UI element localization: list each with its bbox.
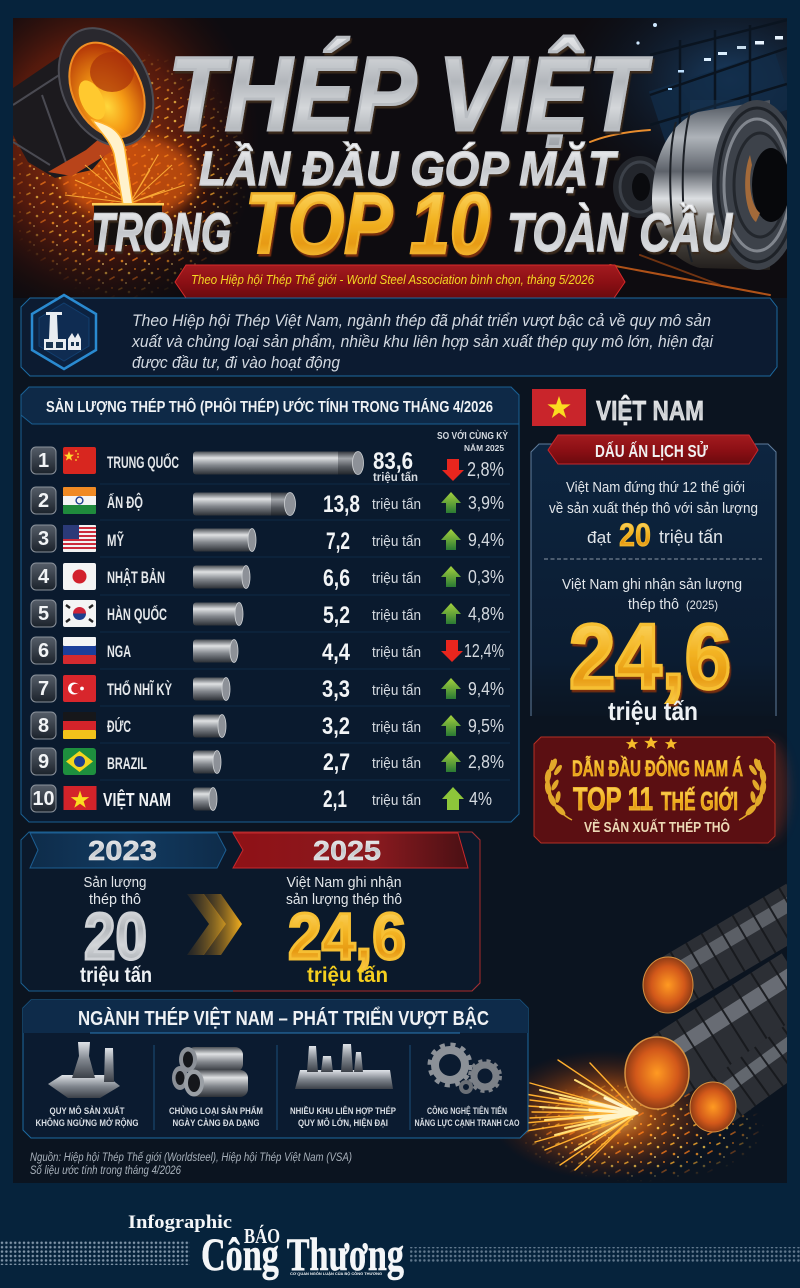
ribbon: source [175, 265, 625, 298]
row 9: Brazil [31, 748, 504, 776]
source note: Nguồn: Hiệp hội Thép Thế giới (Worldsteel), Hiệp hội Thép Việt Nam (VSA) [30, 1152, 352, 1164]
panel: crude steel output chart [21, 387, 519, 822]
item: product range [169, 1047, 263, 1129]
ribbon: source: Theo Hiệp hội Thép Thế giới - World Steel Association bình chọn, tháng 5/2026 [191, 273, 594, 287]
row 1: Trung Quốc: 83,6 [373, 448, 413, 475]
factory windows [636, 22, 787, 142]
arrow: up [441, 751, 461, 772]
row 2: Ấn Độ: ẤN ĐỘ [107, 493, 143, 512]
molten stream [92, 120, 133, 205]
glow: pour [62, 136, 198, 220]
flag: Brazil [63, 748, 96, 775]
row 10: Việt Nam: 2,1 [323, 786, 347, 813]
bar: 4,4 [193, 640, 238, 662]
2025 figures: triệu tấn [307, 964, 388, 987]
row 8: Đức: ĐỨC [107, 717, 131, 736]
arrow: up [441, 529, 461, 550]
2023 figures: triệu tấn [80, 964, 152, 987]
row 2: Ấn Độ: 3,9% [468, 493, 504, 513]
row 10: Việt Nam: 4% [469, 789, 492, 809]
item: integrated complexes: QUY MÔ LỚN, HIỆN ĐẠI [298, 1117, 388, 1129]
title: THÉP VIỆT: THÉP VIỆT [168, 34, 652, 153]
flag: Japan [63, 563, 96, 590]
icon: flag [532, 389, 586, 426]
row 6: Nga: 12,4% [464, 641, 504, 661]
laurel: right [739, 757, 767, 820]
panel: growth of the Vietnamese steel industry [23, 1000, 528, 1138]
row 4: Nhật Bản [31, 563, 504, 592]
rank 9: 9 [38, 751, 49, 773]
rank 4 [31, 563, 56, 590]
footer dots: right [410, 1247, 800, 1262]
row 6: Nga: NGA [107, 643, 131, 661]
rank 7 [31, 675, 56, 702]
intro text: được đầu tư, đi vào hoạt động [132, 354, 341, 372]
row 9: Brazil: 2,7 [323, 749, 350, 776]
title: TRONG: TRONG [91, 201, 231, 263]
ladle body [13, 27, 154, 178]
bar: 3,3 [193, 678, 230, 700]
rank 5: 5 [38, 603, 49, 625]
row 7: Thổ Nhĩ Kỳ: 9,4% [468, 679, 504, 699]
row 8: Đức: triệu tấn [372, 720, 421, 736]
outer margin cover [787, 890, 800, 1190]
row 3: Mỹ: triệu tấn [372, 534, 421, 550]
rank 2: 2 [38, 490, 49, 512]
bar: 6,6 [193, 566, 250, 588]
sparks: scattered [524, 1081, 759, 1181]
text: ranking: Việt Nam đứng thứ 12 thế giới [566, 480, 745, 496]
row 8: Đức: 9,5% [468, 716, 504, 736]
row 3: Mỹ [31, 525, 504, 555]
chart header: SẢN LƯỢNG THÉP THÔ (PHÔI THÉP) ƯỚC TÍNH TRONG THÁNG 4/2026 [46, 397, 493, 416]
publisher logo: Công Thương [201, 1229, 404, 1281]
row 10: Việt Nam [31, 785, 492, 813]
rank 6: 6 [38, 640, 49, 662]
chart header [21, 387, 519, 424]
publisher logo [128, 1212, 404, 1281]
header ribbon: DẤU ẤN LỊCH SỬ [595, 440, 708, 461]
row 6: Nga [31, 637, 504, 666]
row dividers [100, 484, 510, 780]
header artwork [13, 18, 787, 298]
row 3: Mỹ: 9,4% [468, 530, 504, 550]
2025 figures: Việt Nam ghi nhận [286, 875, 402, 891]
title: LẦN ĐẦU GÓP MẶT: LẦN ĐẦU GÓP MẶT [199, 142, 618, 196]
row 1: Trung Quốc: 2,8% [467, 459, 504, 481]
rank 7: 7 [38, 678, 49, 700]
footer dots: left [0, 1241, 190, 1265]
text: ranking: 20 [619, 517, 651, 553]
bar: 5,2 [193, 602, 243, 626]
title: TOP 10: TOP 10 [245, 176, 490, 272]
header ribbon [548, 435, 758, 464]
publisher logo: CƠ QUAN NGÔN LUẬN CỦA BỘ CÔNG THƯƠNG [290, 1271, 382, 1276]
bar: 83,6 [193, 452, 364, 474]
row 1: Trung Quốc [31, 447, 504, 484]
icon: gears [430, 1045, 500, 1092]
2025 figures: 24,6 [288, 899, 406, 973]
row 10: Việt Nam: triệu tấn [372, 793, 421, 809]
arrow: up [441, 678, 461, 699]
row 10: Việt Nam: VIỆT NAM [103, 789, 171, 810]
arrow: up [441, 715, 461, 736]
flag: Russia [63, 637, 96, 664]
rank 8 [31, 712, 56, 739]
row 3: Mỹ: MỸ [107, 530, 124, 550]
rank 3: 3 [38, 528, 49, 550]
rebar 2 [625, 973, 800, 1109]
2023 figures [80, 875, 152, 987]
intro text: xuất và chủng loại sản phẩm, nhiều khu liên hợp sản xuất thép quy mô lớn, hiện đại [131, 333, 714, 351]
item: production scale [36, 1042, 138, 1129]
intro text [131, 312, 714, 372]
row 5: Hàn Quốc: 4,8% [468, 604, 504, 624]
2025 figures [286, 875, 406, 987]
rank 10: 10 [32, 788, 54, 810]
row 2: Ấn Độ: 13,8 [323, 491, 360, 518]
badge: leading Southeast Asia: TOP 11 [573, 781, 653, 817]
2025 figures: sản lượng thép thô [286, 892, 402, 908]
flag: South Korea [63, 600, 96, 627]
sparks: furnace [13, 55, 245, 298]
row 2: Ấn Độ: triệu tấn [372, 497, 421, 513]
big number: 24,6 [569, 606, 731, 708]
text: 2025 output [562, 577, 742, 613]
row 7: Thổ Nhĩ Kỳ [31, 675, 504, 703]
row 1: Trung Quốc: triệu tấn [373, 470, 418, 484]
row 2: Ấn Độ [31, 487, 504, 518]
item: integrated complexes [290, 1044, 397, 1129]
intro text: Theo Hiệp hội Thép Việt Nam, ngành thép đã phát triển vượt bậc cả về quy mô sản [132, 312, 711, 330]
bar: 2,7 [193, 750, 221, 774]
row 1: Trung Quốc: TRUNG QUỐC [107, 452, 179, 472]
arrow: chevrons [187, 894, 242, 955]
comparison column header: NĂM 2025 [464, 443, 504, 453]
flag: Vietnam [64, 786, 96, 810]
item: product range: NGÀY CÀNG ĐA DẠNG [172, 1118, 260, 1129]
item: technology: CÔNG NGHỆ TIÊN TIẾN [427, 1105, 507, 1117]
spark rays [520, 1060, 637, 1170]
title: TOÀN CẦU: TOÀN CẦU [507, 201, 733, 263]
comparison column header [437, 429, 508, 453]
illustration: rebar and sparks [490, 900, 800, 1183]
row 8: Đức: 3,2 [322, 713, 350, 740]
text: 2025 output: thép thô [628, 597, 679, 613]
row 5: Hàn Quốc: 5,2 [323, 602, 350, 629]
rank 1 [31, 447, 56, 474]
arrow: up [442, 787, 464, 810]
icon: factory [32, 295, 96, 369]
flag: USA [63, 525, 96, 552]
heading: Việt Nam flag [532, 389, 704, 426]
text: 2025 output: (2025) [686, 598, 718, 612]
rebar 3 [690, 1037, 800, 1132]
item: technology [414, 1045, 520, 1129]
badge: leading Southeast Asia: THẾ GIỚI [661, 786, 738, 816]
row 5: Hàn Quốc: triệu tấn [372, 608, 421, 624]
row 4: Nhật Bản: 6,6 [323, 565, 350, 592]
2023 figures: Sản lượng [84, 875, 146, 891]
rank 8: 8 [38, 715, 49, 737]
item: integrated complexes: NHIỀU KHU LIÊN HỢP THÉP [290, 1105, 397, 1117]
bar: 3,2 [193, 714, 226, 738]
row 7: Thổ Nhĩ Kỳ: triệu tấn [372, 683, 421, 699]
arrow: up [441, 603, 461, 624]
flag: Germany [63, 712, 96, 739]
2023 figures: thép thô [89, 892, 141, 908]
arrow: down [442, 459, 464, 481]
publisher logo: Infographic [128, 1212, 232, 1233]
flag: Turkey [63, 675, 96, 702]
icon: industrial complex [295, 1044, 393, 1089]
row 4: Nhật Bản: NHẬT BẢN [107, 568, 165, 587]
row 9: Brazil: BRAZIL [107, 755, 147, 773]
panel: historic mark [531, 435, 776, 726]
bar: 2,1 [193, 788, 217, 810]
icon: steel pipes [172, 1047, 248, 1097]
heading: NGÀNH THÉP VIỆT NAM – PHÁT TRIỂN VƯỢT BẬC [78, 1006, 489, 1030]
heading: Việt Nam flag: VIỆT NAM [596, 395, 704, 426]
panel: historic mark: triệu tấn [608, 696, 698, 726]
row 9: Brazil: triệu tấn [372, 756, 421, 772]
large steel coil [652, 100, 800, 270]
band: 2023 [30, 833, 226, 868]
row 4: Nhật Bản: 0,3% [468, 567, 504, 587]
comparison column header: SO VỚI CÙNG KỲ [437, 429, 508, 442]
publisher logo: BÁO [244, 1224, 280, 1248]
row 4: Nhật Bản: triệu tấn [372, 571, 421, 587]
text: ranking [549, 480, 758, 553]
row 6: Nga: 4,4 [322, 639, 351, 666]
item: production scale: QUY MÔ SẢN XUẤT [50, 1105, 125, 1117]
text: 2025 output: Việt Nam ghi nhận sản lượng [562, 577, 742, 593]
pool block [92, 203, 164, 245]
source note [30, 1152, 352, 1177]
band: 2025: 2025 [313, 835, 381, 866]
stars [626, 736, 677, 749]
row 5: Hàn Quốc [31, 600, 504, 629]
flag: China [63, 447, 96, 474]
item: technology: NĂNG LỰC CẠNH TRANH CAO [414, 1118, 520, 1129]
text: ranking: đạt [587, 528, 611, 547]
rank 5 [31, 600, 56, 627]
badge: leading Southeast Asia: VỀ SẢN XUẤT THÉP THÔ [584, 818, 730, 836]
text: ranking: về sản xuất thép thô với sản lượng [549, 501, 758, 517]
glow: factory [596, 18, 787, 158]
rebar 1 [643, 900, 800, 1013]
2023 figures: 20 [84, 899, 147, 973]
source note: Số liệu ước tính trong tháng 4/2026 [30, 1165, 181, 1177]
bar: 7,2 [193, 528, 256, 552]
text: ranking: triệu tấn [659, 527, 723, 547]
arrow: down [441, 640, 463, 662]
band: 2025 [233, 833, 468, 868]
arrow: up [441, 566, 461, 587]
rank 9 [31, 748, 56, 775]
row 9: Brazil: 2,8% [468, 752, 504, 772]
rank 2 [31, 487, 56, 514]
floor reflections [590, 130, 770, 295]
rank 1: 1 [38, 450, 49, 472]
band: 2023: 2023 [88, 835, 157, 866]
laurel: left [544, 757, 572, 820]
row 3: Mỹ: 7,2 [326, 528, 350, 555]
panel: 2023 to 2025 comparison [21, 832, 480, 991]
row 8: Đức [31, 712, 504, 740]
rank 3 [31, 525, 56, 552]
arrow: up [441, 492, 461, 513]
rank 6 [31, 637, 56, 664]
glow: furnace [13, 18, 242, 298]
spark glow [507, 1054, 707, 1176]
row 6: Nga: triệu tấn [372, 645, 421, 661]
badge: leading Southeast Asia [534, 736, 788, 843]
panel: intro [21, 295, 777, 376]
row 5: Hàn Quốc: HÀN QUỐC [107, 604, 167, 624]
rank 4: 4 [38, 566, 50, 588]
item: production scale: KHÔNG NGỪNG MỞ RỘNG [36, 1117, 138, 1129]
row 7: Thổ Nhĩ Kỳ: THỔ NHĨ KỲ [107, 679, 172, 699]
small steel coil [613, 156, 657, 218]
bar: 13,8 [193, 492, 296, 516]
spark rays: pour [65, 155, 185, 203]
row 7: Thổ Nhĩ Kỳ: 3,3 [322, 676, 350, 703]
icon: steel plant [48, 1042, 120, 1098]
flag: India [63, 487, 96, 514]
item: product range: CHỦNG LOẠI SẢN PHẨM [169, 1105, 263, 1117]
